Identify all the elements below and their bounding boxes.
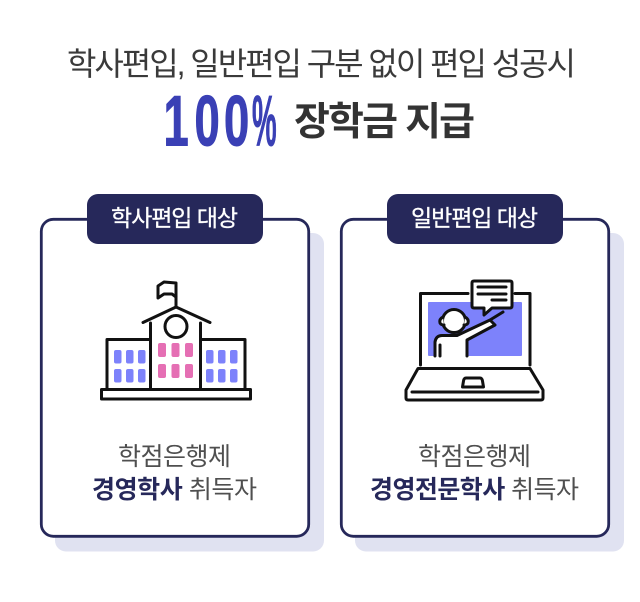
text: credit bank system: 학점은행제	[118, 443, 231, 471]
title: 100% figure: 0	[224, 81, 249, 161]
card body	[341, 219, 609, 536]
title: scholarship text: 장학금 지급	[294, 101, 475, 144]
title: 100% figure: %	[252, 82, 277, 161]
badge	[87, 194, 263, 244]
title: 100% figure: 1	[164, 81, 189, 161]
badge	[387, 194, 563, 244]
title: 100% figure: 0	[194, 81, 220, 161]
title: 100% figure	[164, 81, 277, 161]
panel: academic-degree transfer	[41, 194, 324, 552]
panel: general transfer	[341, 194, 624, 552]
title: subtitle line: 학사편입, 일반편입 구분 없이 편입 성공시	[67, 46, 576, 82]
text: degree earned: 경영학사 취득자	[92, 476, 257, 504]
card body	[41, 219, 309, 536]
icon: online lecture laptop	[406, 281, 543, 400]
text: degree earned: 경영전문학사 취득자	[370, 476, 579, 504]
badge: 일반편입 대상	[411, 205, 538, 231]
card shadow	[55, 233, 324, 552]
text: credit bank system: 학점은행제	[418, 443, 531, 471]
badge: 학사편입 대상	[111, 205, 238, 231]
card shadow	[355, 233, 624, 552]
icon: school building	[102, 282, 250, 399]
